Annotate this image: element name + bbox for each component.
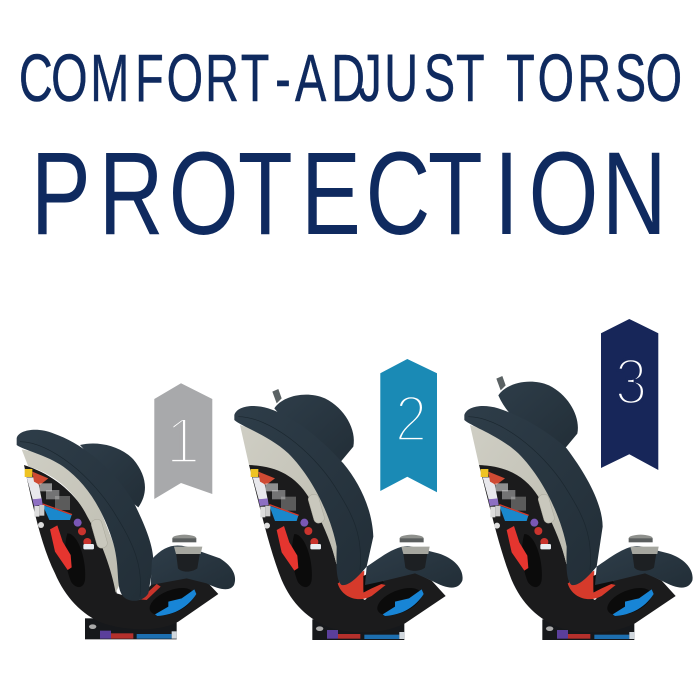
blue handle: [155, 589, 196, 616]
seat stitching: [468, 417, 591, 570]
blue handle: [613, 589, 654, 616]
side button: [537, 493, 556, 524]
red handle: [50, 525, 72, 570]
shell: [24, 465, 218, 629]
title: [19, 42, 682, 260]
side opening: [292, 534, 312, 587]
beige side panel: [240, 425, 340, 565]
ribbon 2: [380, 359, 437, 492]
red handle: [277, 526, 298, 571]
seat lap: [595, 546, 693, 588]
base label: [542, 619, 634, 640]
ribbon 2: 2: [395, 382, 427, 455]
red strap visible: [140, 584, 161, 600]
shell: [249, 465, 446, 632]
side button: [307, 493, 326, 524]
warning labels: [25, 469, 72, 528]
car seat 3: [464, 376, 693, 640]
side opening: [65, 533, 85, 587]
base label: [85, 618, 177, 639]
ribbon 3: 3: [615, 345, 647, 418]
car seat 1: [17, 430, 235, 639]
seat back: [17, 430, 153, 601]
seat stitching: [20, 442, 141, 597]
front opening: [603, 582, 655, 621]
front opening: [373, 582, 425, 621]
headrest: [272, 389, 354, 463]
heading: line one: COMFORT-ADJUST TORSO: [19, 42, 682, 116]
front opening: [146, 582, 198, 621]
side opening: [522, 534, 542, 587]
heading: line two: PROTECTION: [31, 128, 667, 260]
seat stitching: [238, 417, 361, 570]
seat stage badges: [74, 519, 94, 549]
seat lap: [365, 546, 463, 588]
cup holder: [629, 535, 659, 571]
seat stage badges: [300, 519, 321, 549]
warning labels: [251, 469, 299, 529]
red padding: [568, 571, 616, 599]
headrest: [496, 376, 578, 450]
beige side panel: [470, 425, 570, 565]
seat lap: [151, 545, 235, 589]
ribbon 3: [601, 319, 658, 470]
ribbon 1: 1: [166, 404, 200, 477]
cup holder: [400, 535, 430, 571]
shell: [479, 465, 676, 632]
red handle: [507, 526, 528, 571]
base label: [312, 619, 404, 640]
red padding: [338, 571, 386, 599]
warning labels: [481, 469, 529, 529]
seat back: [234, 406, 373, 585]
seat stage badges: [530, 519, 551, 549]
dark lap gap: [593, 570, 614, 593]
car seat 2: [234, 389, 463, 640]
blue handle: [383, 589, 424, 616]
seat back: [464, 406, 603, 585]
ribbon 1: [154, 383, 212, 499]
side button: [90, 518, 109, 549]
headrest: [80, 443, 145, 507]
cup holder: [172, 535, 202, 572]
beige side panel: [22, 449, 123, 593]
dark lap gap: [363, 570, 384, 593]
